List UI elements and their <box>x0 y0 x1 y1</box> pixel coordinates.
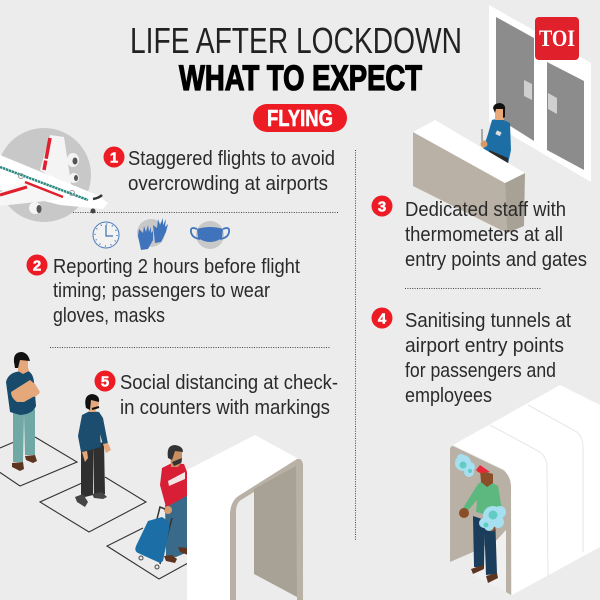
icon: clock <box>93 222 119 248</box>
item 3 <box>372 196 587 271</box>
item 2: 2 <box>33 258 41 274</box>
item 2: timing; passengers to wear <box>53 279 270 302</box>
category pill: flying: FLYING <box>267 105 333 131</box>
item 1 <box>104 146 335 195</box>
item 2: Reporting 2 hours before flight <box>53 255 300 278</box>
TOI logo badge <box>535 17 579 60</box>
item 4 <box>372 308 571 407</box>
TOI logo badge: TOI <box>539 26 575 51</box>
item 4: Sanitising tunnels at <box>405 309 571 332</box>
item 3: thermometers at all <box>405 223 563 246</box>
item 4: for passengers and <box>405 359 556 382</box>
person 1 <box>6 352 40 471</box>
item 3: 3 <box>378 198 386 216</box>
icon: face mask <box>191 221 229 249</box>
item 3: Dedicated staff with <box>405 198 566 221</box>
item 4: employees <box>405 384 492 407</box>
item 5 <box>94 370 338 419</box>
person 2 <box>75 394 111 507</box>
illustration: terminal doors <box>489 5 591 182</box>
item 4: 4 <box>378 310 387 328</box>
person 3 with suitcase <box>135 445 188 569</box>
title <box>130 20 462 98</box>
illustration: staff member with thermometer <box>480 103 511 164</box>
title: WHAT TO EXPECT <box>179 59 422 98</box>
illustration: check-in gate <box>187 435 303 600</box>
item 5: Social distancing at check- <box>120 371 338 394</box>
item 5: in counters with markings <box>120 396 330 419</box>
item 4: airport entry points <box>405 334 564 357</box>
illustration: airplane <box>0 128 108 222</box>
floor markings <box>0 437 188 579</box>
item 1: Staggered flights to avoid <box>128 147 335 170</box>
item 1: overcrowding at airports <box>128 172 328 195</box>
item 1: 1 <box>110 150 118 166</box>
title: LIFE AFTER LOCKDOWN <box>130 20 462 61</box>
illustration: sanitising tunnel <box>450 385 600 595</box>
item 5: 5 <box>101 374 109 390</box>
item 2 <box>26 254 300 327</box>
item 2: gloves, masks <box>53 304 165 327</box>
icon: gloves <box>137 218 168 250</box>
passenger in tunnel with mist <box>455 454 506 583</box>
illustration: check desk <box>413 120 525 233</box>
